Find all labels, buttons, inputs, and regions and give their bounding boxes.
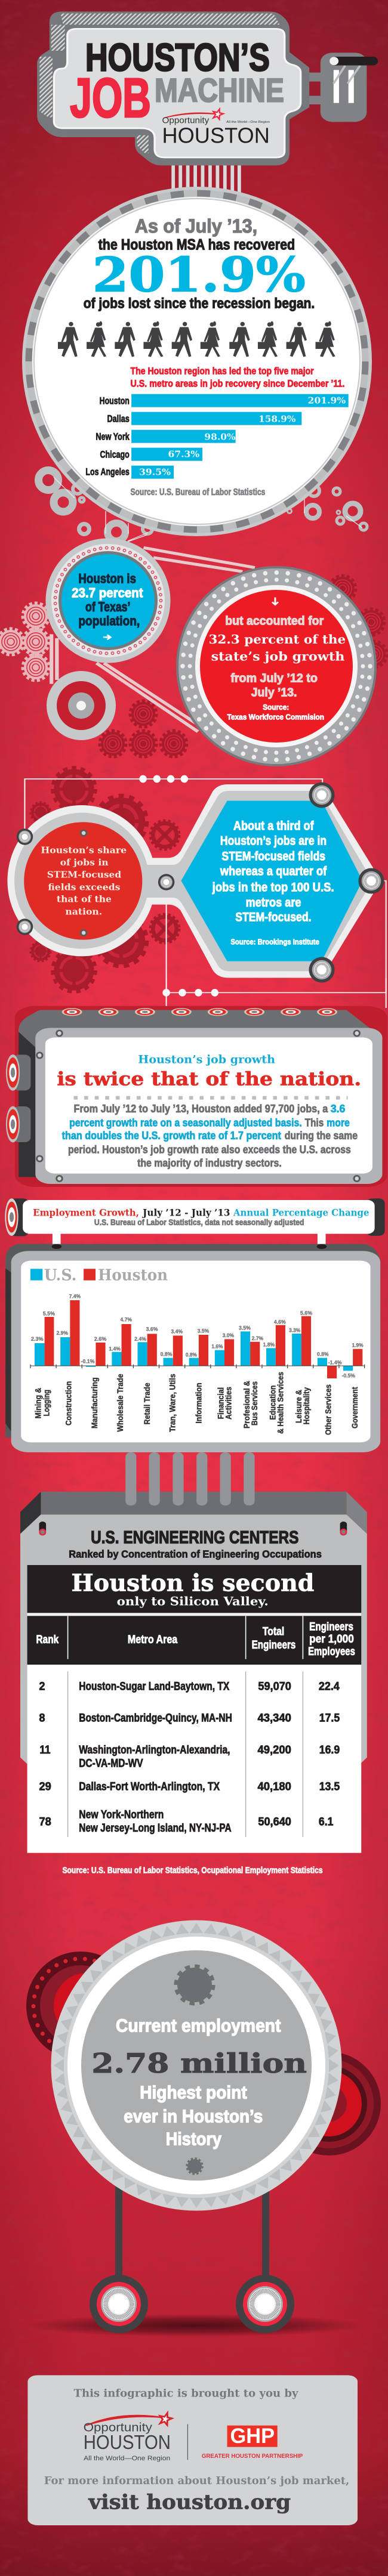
title: HOUSTON’S [85, 36, 270, 79]
footer call to action [44, 2475, 349, 2514]
paragraph: This [305, 1117, 324, 1129]
employment text: History [166, 2129, 222, 2150]
hanger posts [53, 1233, 326, 1245]
logo: Opportunity Houston [162, 106, 270, 147]
callout text: population [72, 572, 143, 639]
chart value labels: -1.4% [328, 1360, 341, 1366]
heading: Houston’s job growth [138, 1053, 275, 1066]
legend: Houston [98, 1266, 168, 1284]
chart value labels: 3.5% [198, 1329, 209, 1334]
title: JOB [70, 67, 151, 129]
table rows: 22.4 [319, 1680, 340, 1693]
callout text: population: 23.7 percent [72, 586, 143, 601]
employment text: Current employment [116, 2016, 281, 2036]
panel: employment growth chart [5, 1198, 385, 1452]
chart value labels: 7.4% [69, 1294, 81, 1300]
callout text: job growth: July ’13. [251, 685, 297, 699]
chart title [33, 1207, 369, 1227]
chart value labels: 4.6% [274, 1319, 286, 1325]
title [70, 36, 284, 129]
logo: Greater Houston Partnership: GHP [230, 2425, 275, 2448]
logo: Greater Houston Partnership: GREATER HOUSTON PARTNERSHIP [202, 2453, 303, 2460]
wheels [90, 2275, 294, 2333]
machine face panel [54, 29, 301, 157]
bolts on STEM frame [17, 782, 384, 983]
chart category labels: Logging [42, 1390, 51, 1416]
table rows: Dallas-Fort Worth-Arlington, TX [79, 1780, 220, 1793]
bar chart: job recovery by metro: 201.9% [308, 395, 346, 406]
casing [15, 1006, 387, 1187]
bar chart: job recovery by metro: 158.9% [258, 414, 296, 425]
blue hexagon [181, 801, 362, 961]
table rows: 78 [39, 1815, 51, 1828]
logo: Opportunity Houston: All the World—One Region [226, 120, 270, 124]
table rows: 16.9 [319, 1743, 340, 1756]
chart value labels: 3.3% [289, 1328, 300, 1334]
side buttons [6, 1054, 30, 1142]
table rows: 11 [39, 1743, 51, 1756]
employment text: ever in Houston’s [124, 2107, 263, 2126]
chart value labels: 0.8% [186, 1352, 197, 1358]
title: MACHINE [155, 72, 284, 109]
table rows: 49,200 [258, 1743, 291, 1756]
panel: job growth machine [6, 978, 387, 1187]
table header: Engineers [309, 1620, 353, 1633]
decorative wheel: left behind employment dial [26, 1952, 135, 2060]
table rows: New York-Northern [79, 1808, 164, 1821]
chart value labels: 2.4% [134, 1337, 146, 1343]
STEM fields text: STEM-focused. [235, 910, 311, 924]
STEM fields text: metros are [246, 895, 301, 910]
employment dial [51, 1921, 341, 2210]
table header: Metro Area [128, 1632, 178, 1646]
heading: is twice that of the nation. [57, 1069, 361, 1090]
table header: Total [263, 1625, 284, 1638]
table rows: DC-VA-MD-WV [79, 1756, 143, 1770]
dots on connector [139, 775, 188, 783]
chart title: U.S. Bureau of Labor Statistics, data not seasonally adjusted [94, 1218, 304, 1227]
bar chart: job recovery by metro: 98.0% [204, 432, 236, 443]
STEM share text: of jobs in [60, 857, 109, 868]
chart category labels: Bus Services [250, 1381, 259, 1425]
legend: U.S. [44, 1266, 77, 1284]
ground shadow [25, 2314, 365, 2337]
table header [27, 1616, 361, 1665]
panel: sponsors footer [27, 2375, 358, 2525]
icons: walking workers [58, 321, 335, 357]
connector lines [24, 779, 386, 1008]
chart category labels: Information [194, 1383, 204, 1424]
small pulleys around gauge [38, 470, 367, 541]
logo divider [187, 2424, 188, 2460]
chart value labels: 0.8% [161, 1352, 173, 1357]
gears behind population circles [0, 576, 387, 756]
red oval [24, 822, 142, 940]
STEM share text: STEM-focused [47, 869, 122, 880]
table rows: 6.1 [319, 1815, 333, 1828]
table rows: 8 [39, 1711, 45, 1724]
chart value labels: 4.7% [120, 1318, 132, 1323]
STEM fields text: STEM-focused fields [221, 849, 325, 864]
STEM share text: Houston’s share [41, 845, 127, 855]
connecting pipes [125, 1452, 255, 1505]
chart value labels: -0.5% [341, 1373, 355, 1379]
logo: Opportunity Houston: All the World—One Region [84, 2454, 170, 2462]
bar chart: job recovery by metro: Houston [100, 395, 130, 406]
STEM share text: nation. [65, 906, 102, 917]
crank handle [321, 52, 378, 122]
callout text: job growth: from July ’12 to [230, 671, 318, 685]
chart category labels: Tran, Ware, Utils [168, 1374, 177, 1432]
table rows: 17.5 [319, 1711, 340, 1724]
bar chart: job recovery by metro: Chicago [100, 449, 130, 460]
table rows: 2 [39, 1680, 45, 1693]
pipes to gauge circle [171, 165, 241, 192]
chart category labels: Mining & [33, 1388, 43, 1418]
chart value labels: 2.6% [94, 1337, 106, 1343]
connector stubs to crank [308, 73, 322, 104]
switches [39, 1522, 347, 1771]
gauge: recovery circle [22, 187, 372, 536]
chart category labels: Construction [64, 1381, 73, 1425]
table heading [69, 1527, 322, 1560]
icon: dial gear bottom [187, 2159, 202, 2173]
STEM fields text: whereas a quarter of [220, 864, 327, 879]
decorative wheel: right behind employment dial [277, 2052, 381, 2156]
logo: Opportunity Houston: HOUSTON [84, 2431, 171, 2453]
paragraph: 3.6 [331, 1103, 345, 1115]
chart category labels: Leisure & [294, 1390, 303, 1423]
chart value labels: 1.4% [109, 1346, 121, 1352]
machine top [20, 1492, 367, 1534]
bar chart: U.S. bars [35, 1331, 353, 1371]
footer call to action: visit houston.org [88, 2491, 291, 2514]
chart category labels: Activities [224, 1387, 233, 1420]
bar chart: job recovery by metro: New York [96, 431, 130, 442]
table body [27, 1665, 361, 1853]
STEM fields text: jobs in the top 100 U.S. [212, 880, 334, 895]
employment text: 2.78 million [91, 2047, 307, 2079]
machine hatched edges [39, 14, 279, 153]
table header: Employees [308, 1644, 355, 1657]
frame shapes [7, 784, 381, 978]
chart value labels: 3.4% [171, 1329, 183, 1335]
paragraph: the majority of industry sectors. [137, 1157, 282, 1169]
chart category labels: Retail Trade [143, 1383, 152, 1424]
callout text: population: of Texas’ [85, 600, 130, 614]
legend [30, 1266, 168, 1284]
panel: STEM comparison [7, 775, 386, 1008]
logo: Opportunity Houston: Opportunity [162, 115, 210, 125]
paragraph: than doubles the U.S. growth rate of 1.7 percent [62, 1130, 281, 1142]
top buttons [62, 1008, 337, 1025]
logo: Opportunity Houston: HOUSTON [162, 123, 270, 147]
scroll banner [5, 1198, 385, 1236]
table rows: Washington-Arlington-Alexandria, [79, 1743, 230, 1756]
panel: engineering centers table [20, 1452, 367, 1853]
callout text: job growth: Source: [263, 703, 289, 712]
chart casing [5, 1244, 380, 1452]
pulley wheel [47, 671, 116, 740]
chart category labels: Manufacturing [90, 1377, 99, 1428]
STEM fields text: Source: Brookings Institute [230, 938, 319, 947]
table rows: Houston-Sugar Land-Baytown, TX [79, 1680, 230, 1693]
chart value labels: 1.8% [263, 1343, 275, 1348]
callout text: job growth: Texas Workforce Commision [227, 713, 324, 722]
logo: Opportunity Houston: Opportunity [84, 2420, 152, 2434]
bar chart: job recovery by metro: 67.3% [168, 449, 200, 460]
panel: machine header with title [37, 11, 378, 192]
chart value labels: 3.5% [239, 1325, 251, 1331]
STEM share text [41, 845, 127, 917]
table header: per 1,000 [309, 1632, 354, 1645]
callout text: job growth: state’s job growth [211, 650, 344, 664]
frame bolts [36, 1029, 361, 1182]
table rows: 59,070 [258, 1680, 291, 1693]
chart value labels: 0.8% [317, 1352, 329, 1357]
chart category labels: Financial [216, 1387, 226, 1419]
chart value labels: 1.9% [352, 1343, 364, 1349]
lower connector [162, 978, 386, 997]
chart intro text [130, 366, 344, 389]
table rows: 50,640 [258, 1815, 291, 1828]
dotted divider [74, 1093, 347, 1103]
footer card [27, 2375, 358, 2525]
table rows: 13.5 [319, 1780, 340, 1793]
paragraph: more [327, 1117, 350, 1129]
table panel body [20, 1514, 367, 1777]
STEM share text: fields exceeds [48, 882, 120, 892]
panel: recovery statistic [58, 236, 349, 497]
table rows: Boston-Cambridge-Quincy, MA-NH [79, 1711, 232, 1724]
chart value labels [31, 1294, 364, 1379]
bar chart: job recovery by metro [85, 394, 349, 479]
callout banner: Houston is second [71, 1569, 314, 1597]
chart value labels: 3.6% [146, 1327, 158, 1332]
logo: Opportunity Houston [84, 2408, 177, 2462]
footer intro: This infographic is brought to you by [74, 2387, 298, 2399]
chart value labels: 2.9% [57, 1331, 68, 1337]
chart title: Employment Growth, [33, 1207, 139, 1219]
heading [57, 1053, 361, 1090]
chart title: July ’12 - July ’13 [142, 1207, 230, 1219]
table rows [39, 1680, 340, 1834]
chart category labels [33, 1372, 359, 1435]
chart value labels: 5.5% [43, 1311, 55, 1317]
chart axis [30, 1365, 365, 1368]
chart value labels: 3.0% [223, 1333, 234, 1339]
table rows: 43,340 [258, 1711, 291, 1724]
callout: job growth circle [176, 566, 377, 766]
chart category labels: Profesional & [242, 1381, 251, 1428]
chart category labels: Education [268, 1386, 278, 1420]
bar chart: job recovery by metro: 39.5% [139, 467, 171, 478]
logo: Greater Houston Partnership [202, 2425, 303, 2460]
chart category labels: Wholesale Trade [116, 1374, 125, 1432]
chart value labels: 1.6% [211, 1344, 223, 1350]
table rows: New Jersey-Long Island, NY-NJ-PA [79, 1821, 232, 1834]
chart value labels: 5.6% [300, 1310, 312, 1316]
legs of the machine [115, 2183, 269, 2290]
small bolts [80, 830, 87, 936]
bar chart: Houston bars [45, 1300, 362, 1378]
callout text: job growth: 32.3 percent of the [208, 632, 346, 647]
callout text: population: population, [78, 614, 140, 629]
source: Source: U.S. Bureau of Labor Statistics [130, 487, 265, 497]
chart category labels: & Health Services [276, 1372, 285, 1434]
chart value labels: 2.7% [252, 1336, 263, 1342]
heading: as of July: As of July ’13, [135, 215, 257, 237]
employment text: Highest point [140, 2083, 247, 2102]
bar chart: job recovery by metro: Dallas [107, 413, 130, 424]
callout text: job growth: but accounted for [225, 614, 324, 627]
table header: Rank [36, 1632, 59, 1646]
callout text: job growth [208, 598, 346, 722]
table header: Engineers [252, 1638, 295, 1651]
callout text: population: Houston is [78, 572, 136, 586]
chart value labels: -0.1% [81, 1359, 94, 1365]
bar chart: job recovery by metro: Los Angeles [85, 466, 130, 477]
STEM fields text: About a third of [233, 819, 314, 833]
table rows: 29 [39, 1780, 51, 1793]
big number: 201.9% [93, 247, 306, 303]
drive belts [51, 535, 255, 732]
statement text: the Houston MSA has recovered [98, 236, 295, 253]
STEM fields text: Houston’s jobs are in [220, 834, 327, 848]
icon: dial gear top [177, 1967, 213, 2003]
employment text [91, 2016, 307, 2150]
STEM share text: that of the [57, 893, 112, 904]
gears behind STEM panel [31, 768, 178, 991]
chart value labels: 2.3% [31, 1337, 44, 1343]
table rows: 40,180 [258, 1780, 291, 1793]
machine outer casing [37, 11, 309, 165]
callout banner [27, 1565, 361, 1616]
STEM fields text [212, 819, 334, 947]
callout: population circle [45, 538, 171, 663]
chart category labels: Hospitality [302, 1387, 311, 1424]
chart category labels: Government [350, 1387, 359, 1428]
chart category labels: Other Services [324, 1384, 333, 1435]
paragraph [62, 1103, 358, 1169]
callout banner: only to Silicon Valley. [117, 1595, 269, 1609]
